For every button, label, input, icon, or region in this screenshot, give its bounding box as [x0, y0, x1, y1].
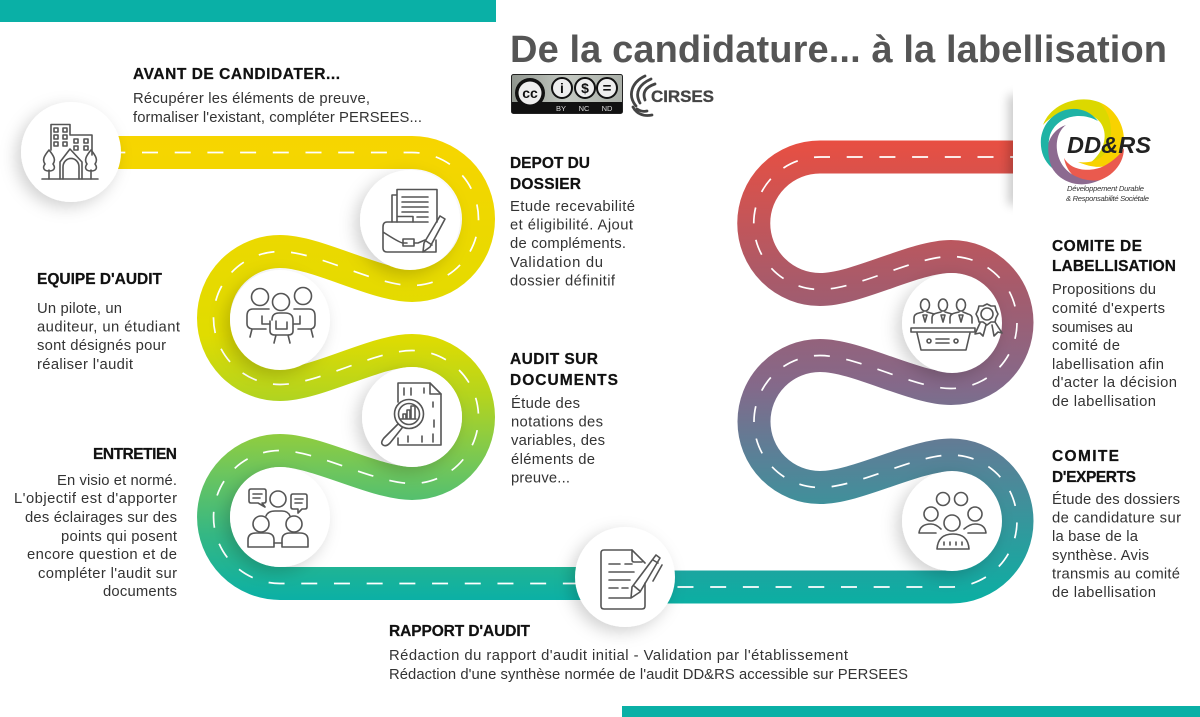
text block: audit sur documents: notations des [511, 414, 603, 430]
text block: rapport d'audit: Rédaction d'une synthèse normée de l'audit DD&RS accessible sur PERSEES [389, 667, 908, 683]
CC BY-NC-ND badge [512, 74, 622, 114]
road: right, red to teal [620, 157, 1020, 587]
text block: comite d'experts: Étude des dossiers [1052, 491, 1180, 508]
step icon: report and pen [575, 527, 675, 627]
text block: depot du dossier: et éligibilité. Ajout [510, 218, 633, 234]
DD&RS logo panel: DD&RS [1067, 132, 1151, 158]
text block: depot du dossier: de compléments. [510, 236, 626, 252]
text block: audit sur documents: AUDIT SUR [510, 351, 598, 368]
text block: comite d'experts: transmis au comité [1052, 566, 1180, 582]
text block: avant de candidater [133, 66, 422, 126]
text block: audit sur documents: preuve... [511, 470, 570, 486]
CC BY-NC-ND badge: = [603, 80, 612, 97]
text block: comite de labellisation [1052, 238, 1177, 410]
text block: comite de labellisation: Propositions du [1052, 282, 1156, 298]
DD&RS logo panel [1008, 80, 1200, 220]
text block: audit sur documents: variables, des [511, 433, 605, 449]
text block: comite de labellisation: labellisation afin [1052, 357, 1164, 373]
text block: comite de labellisation: soumises au [1052, 320, 1133, 336]
text block: equipe d'audit: sont désignés pour [37, 338, 166, 354]
text block: entretien: L'objectif est d'apporter [14, 491, 177, 507]
CC BY-NC-ND badge: cc [522, 85, 538, 101]
CC BY-NC-ND badge: NC [579, 104, 590, 113]
text block: depot du dossier: Validation du [510, 255, 603, 271]
DD&RS logo panel: Développement Durable [1067, 184, 1144, 193]
text block: rapport d'audit: Rédaction du rapport d'audit initial - Validation par l'établissement [389, 648, 848, 664]
text block: comite d'experts: synthèse. Avis [1052, 548, 1149, 564]
CC BY-NC-ND badge: BY [556, 104, 566, 113]
text block: avant de candidater: Récupérer les éléments de preuve, [133, 91, 370, 107]
CC BY-NC-ND badge: i [560, 80, 564, 96]
text block: comite de labellisation: LABELLISATION [1052, 258, 1176, 275]
text block: entretien [14, 446, 177, 600]
text block: comite de labellisation: comité d'experts [1052, 301, 1165, 317]
text block: audit sur documents: Étude des [511, 395, 580, 412]
text block: depot du dossier [510, 155, 635, 290]
text block: depot du dossier: DOSSIER [510, 176, 581, 193]
text block: comite de labellisation: COMITE DE [1052, 238, 1142, 255]
CIRSES logo: CIRSES [651, 87, 714, 106]
text block: avant de candidater: formaliser l'existant, compléter PERSEES... [133, 110, 422, 126]
text block: audit sur documents [510, 351, 618, 486]
DD&RS logo panel: & Responsabilité Sociétale [1066, 194, 1149, 203]
text block: comite de labellisation: comité de [1052, 338, 1120, 354]
text block: depot du dossier: DEPOT DU [510, 155, 590, 172]
top teal bar [0, 0, 496, 22]
text block: equipe d'audit: auditeur, un étudiant [37, 320, 180, 336]
text block: entretien: documents [103, 584, 177, 600]
text block: equipe d'audit [37, 271, 180, 373]
text block: audit sur documents: éléments de [511, 452, 595, 468]
text block: equipe d'audit: réaliser l'audit [37, 357, 133, 373]
step icon: interview conversation [230, 467, 330, 567]
step icon: audit team [230, 270, 330, 370]
step icon: data under magnifier [362, 367, 462, 467]
text block: comite d'experts: de candidature sur [1052, 510, 1181, 526]
step icon: committee of experts [902, 471, 1002, 571]
text block: comite d'experts: de labellisation [1052, 585, 1156, 601]
CC BY-NC-ND badge: ND [602, 104, 613, 113]
text block: audit sur documents: DOCUMENTS [510, 372, 618, 389]
text block: comite d'experts: D'EXPERTS [1052, 469, 1136, 486]
text block: entretien: En visio et normé. [57, 473, 177, 489]
road: left, yellow to teal [118, 152, 630, 584]
text block: depot du dossier: dossier définitif [510, 274, 616, 290]
text block: comite de labellisation: de labellisation [1052, 394, 1156, 410]
text block: entretien: ENTRETIEN [93, 446, 177, 463]
CIRSES logo [631, 76, 714, 116]
text block: avant de candidater: AVANT DE CANDIDATER... [133, 66, 340, 83]
text block: equipe d'audit: EQUIPE D'AUDIT [37, 271, 163, 288]
text block: equipe d'audit: Un pilote, un [37, 301, 122, 317]
text block: depot du dossier: Etude recevabilité [510, 199, 635, 215]
title: De la candidature... à la labellisation [510, 29, 1167, 71]
text block: entretien: points qui posent [61, 529, 177, 545]
text block: entretien: encore question et de [27, 547, 177, 563]
step icon: labelling committee with rosette [902, 273, 1002, 373]
text block: rapport d'audit [389, 623, 908, 683]
text block: entretien: compléter l'audit sur [38, 566, 177, 582]
step icon: campus buildings [21, 102, 121, 202]
text block: comite d'experts [1052, 448, 1181, 601]
text block: entretien: des éclairages sur des [25, 510, 177, 526]
step icon: document and briefcase [360, 170, 460, 270]
text block: rapport d'audit: RAPPORT D'AUDIT [389, 623, 531, 640]
text block: comite de labellisation: d'acter la décision [1052, 375, 1177, 391]
bottom teal bar [622, 706, 1200, 717]
text block: comite d'experts: COMITE [1052, 448, 1119, 465]
CC BY-NC-ND badge: $ [581, 80, 589, 96]
text block: comite d'experts: la base de la [1052, 529, 1139, 545]
